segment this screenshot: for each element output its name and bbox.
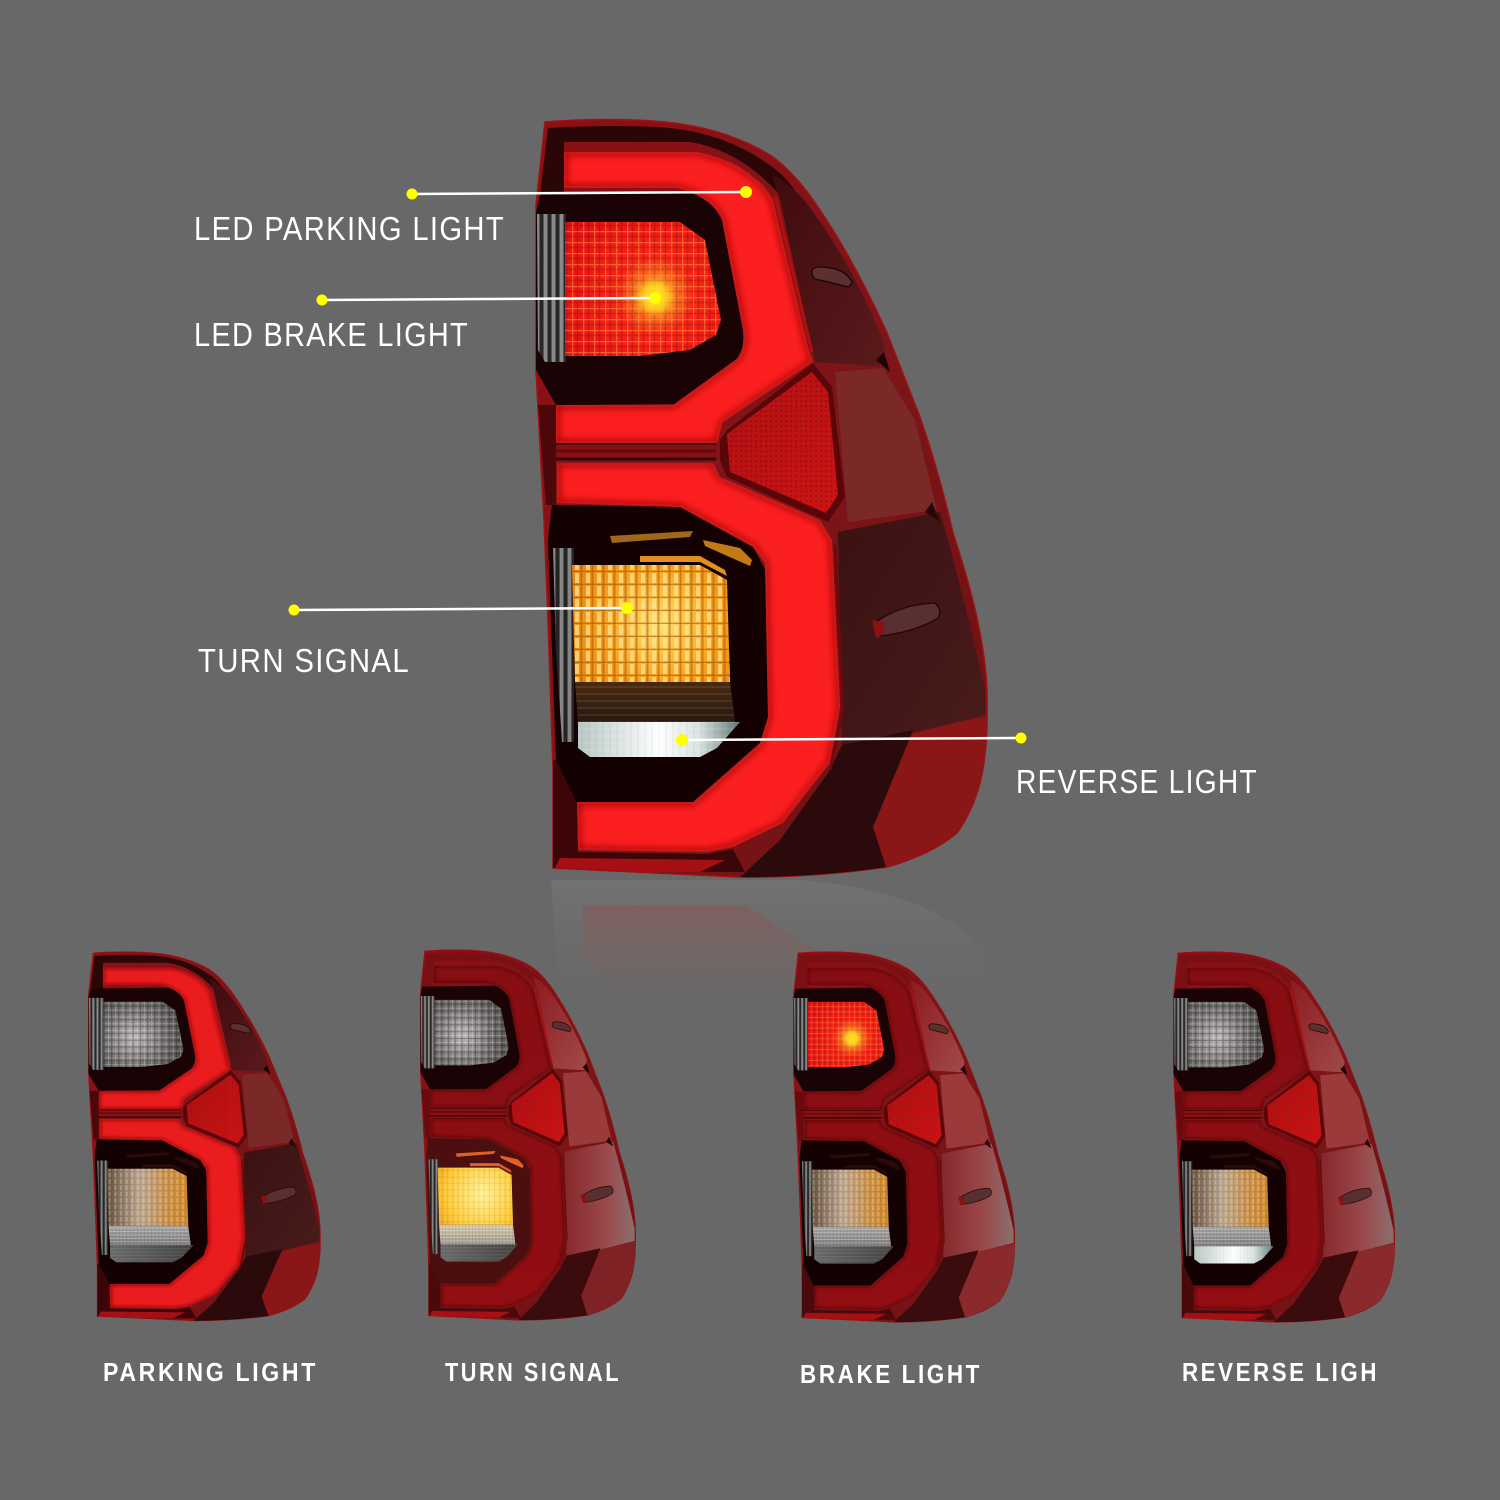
brake light label: BRAKE LIGHT <box>800 1359 982 1389</box>
callout: reverse light <box>676 732 1258 800</box>
turn signal lamp <box>418 950 637 1322</box>
callout: reverse light: REVERSE LIGHT <box>1016 763 1258 800</box>
panel: turn signal <box>418 950 637 1387</box>
callout: LED brake light: LED BRAKE LIGHT <box>194 316 469 353</box>
callout: LED parking light <box>194 186 752 247</box>
callout: turn signal <box>198 602 633 679</box>
reverse light lamp <box>1171 952 1396 1324</box>
turn signal label: TURN SIGNAL <box>445 1357 621 1387</box>
callout: LED parking light: LED PARKING LIGHT <box>194 210 505 247</box>
parking light lamp <box>85 952 322 1322</box>
parking light label: PARKING LIGHT <box>103 1357 318 1387</box>
main tail light <box>530 120 990 880</box>
reverse light label: REVERSE LIGH <box>1182 1357 1379 1387</box>
panel: brake light <box>791 952 1016 1389</box>
panel: parking light <box>85 952 322 1387</box>
brake light lamp <box>791 952 1016 1324</box>
callout: turn signal: TURN SIGNAL <box>198 642 410 679</box>
panel: reverse light <box>1171 952 1396 1387</box>
callout: LED brake light <box>194 292 661 353</box>
lamp floor reflection <box>551 880 985 1010</box>
